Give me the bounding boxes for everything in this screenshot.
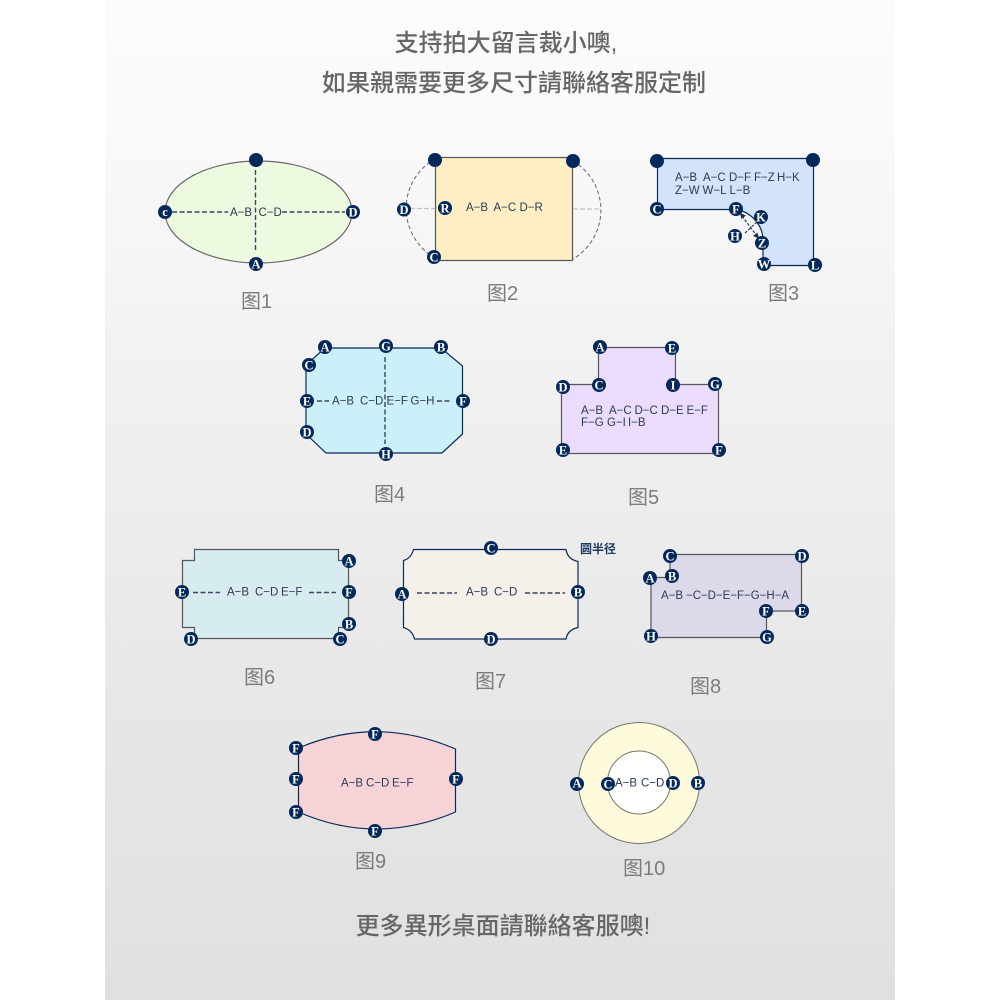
figure 2: rectangle with arc ends: R: [440, 202, 450, 216]
figure 4: chamfered rectangle: [300, 339, 470, 506]
figure 4: chamfered rectangle: H: [381, 448, 391, 462]
figure 3: notched rectangle: F−Z: [754, 172, 775, 184]
figure 6: notched corners rectangle: C−D: [255, 586, 278, 598]
figure 9: barrel shape: F: [371, 728, 379, 742]
figure 6: notched corners rectangle: A: [344, 554, 354, 568]
figure 1: ellipse: A−B: [230, 207, 252, 219]
figure 2: rectangle with arc ends: A−C: [494, 202, 516, 214]
caption 图9: 图9: [355, 851, 386, 873]
figure 7: concave corners rectangle: C: [486, 542, 496, 556]
figure 5: stepped rectangle: A−B: [581, 405, 603, 417]
figure 5: stepped rectangle: A−C: [609, 405, 632, 417]
figure 8: irregular rectangle: A: [645, 572, 655, 586]
title: 支持拍大留言裁小噢,: [395, 30, 617, 57]
title: 如果親需要更多尺寸請聯絡客服定制: [322, 70, 706, 97]
figure 3: notched rectangle: L: [811, 258, 819, 272]
figure 9: barrel shape: F: [292, 806, 300, 820]
figure 7: concave corners rectangle: B: [574, 586, 582, 600]
figure 3: notched rectangle: H: [730, 230, 740, 244]
figure 8: irregular rectangle: A−B: [661, 590, 683, 602]
figure 3: notched rectangle: K: [756, 210, 766, 224]
figure 3: notched rectangle: H−K: [777, 172, 800, 184]
caption 图2: 图2: [487, 283, 518, 305]
figure 8: irregular rectangle: [643, 549, 809, 698]
figure 6: notched corners rectangle: E−F: [281, 586, 302, 598]
figure 7: concave corners rectangle: [395, 541, 616, 693]
label: corner radius: 圆半径: [580, 541, 616, 556]
figure 6: notched corners rectangle: F: [345, 586, 353, 600]
figure 2: rectangle with arc ends: A−B: [466, 202, 488, 214]
figure 3: notched rectangle: Z−W: [675, 185, 700, 197]
caption 图5: 图5: [628, 487, 659, 509]
figure 4: chamfered rectangle: D: [302, 426, 312, 440]
figure 10: ring: A−B: [615, 778, 637, 790]
figure 4: chamfered rectangle: E: [303, 394, 311, 408]
figure 8: irregular rectangle: F: [762, 604, 770, 618]
figure 5: stepped rectangle: G: [710, 378, 720, 392]
figure 7: concave corners rectangle: C−D: [494, 586, 517, 598]
figure 6: notched corners rectangle: D: [186, 632, 196, 646]
figure 5: stepped rectangle: A: [595, 340, 605, 354]
figure 3: notched rectangle: F: [732, 202, 740, 216]
figure 9: barrel shape: C−D: [366, 778, 389, 790]
figure 10: ring: D: [668, 776, 678, 790]
figure 6: notched corners rectangle: B: [345, 618, 353, 632]
figure 3: notched rectangle: W−L: [702, 185, 727, 197]
figure 10: ring: C: [603, 778, 613, 792]
figure 5: stepped rectangle: I: [671, 378, 676, 392]
background panel: [105, 0, 895, 1000]
figure 5: stepped rectangle: F: [715, 444, 723, 458]
figure 3: notched rectangle: [650, 153, 822, 305]
figure 2: rectangle with arc ends: D−R: [520, 202, 543, 214]
caption 图10: 图10: [623, 858, 665, 880]
figure 5: stepped rectangle: G−I: [607, 417, 626, 429]
figure 6: notched corners rectangle: C: [335, 632, 345, 646]
title: [322, 30, 706, 97]
figure 9: barrel shape: E−F: [392, 778, 413, 790]
figure 5: stepped rectangle: C: [594, 378, 604, 392]
figure 8: irregular rectangle: B: [668, 570, 676, 584]
figure 10: ring: C−D: [641, 778, 664, 790]
figure 4: chamfered rectangle: A−B: [332, 396, 354, 408]
figure 10: ring: [570, 722, 705, 880]
figure 1: ellipse: c: [162, 205, 168, 219]
footer note: 更多異形桌面請聯絡客服噢!: [356, 913, 650, 940]
figure 3: notched rectangle: Z: [758, 236, 766, 250]
caption 图3: 图3: [768, 283, 799, 305]
figure 5: stepped rectangle: I−B: [628, 417, 646, 429]
figure 5: stepped rectangle: F−G: [581, 417, 604, 429]
figure 1: ellipse: C−D: [258, 207, 282, 219]
figure 9: barrel shape: F: [452, 772, 460, 786]
figure 9: barrel shape: F: [292, 772, 300, 786]
figure 8: irregular rectangle: C: [665, 550, 675, 564]
figure 2: rectangle with arc ends: C: [429, 250, 439, 264]
figure 5: stepped rectangle: E: [559, 444, 567, 458]
figure 5: stepped rectangle: E−F: [686, 405, 708, 417]
figure 8: irregular rectangle: D: [797, 550, 807, 564]
figure 3: notched rectangle: A−C: [703, 172, 726, 184]
figure 5: stepped rectangle: D−C: [634, 405, 658, 417]
figure 1: ellipse: D: [348, 206, 358, 220]
figure 5: stepped rectangle: D−E: [661, 405, 684, 417]
figure 7: concave corners rectangle: D: [486, 632, 496, 646]
figure 3: notched rectangle: A−B: [675, 172, 697, 184]
caption 图1: 图1: [241, 291, 272, 313]
figure 8: irregular rectangle: E: [798, 604, 806, 618]
figure 6: notched corners rectangle: [175, 550, 356, 689]
figure 10: ring: A: [572, 776, 582, 790]
figure 1: ellipse: A: [251, 258, 261, 272]
figure 8: irregular rectangle: H: [646, 630, 656, 644]
figure 8: irregular rectangle: −C−D−E−F−G−H−A: [686, 590, 789, 602]
caption 图8: 图8: [690, 676, 721, 698]
figure 6: notched corners rectangle: E: [178, 586, 186, 600]
figure 9: barrel shape: A−B: [341, 778, 363, 790]
figure 9: barrel shape: F: [371, 824, 379, 838]
figure 6: notched corners rectangle: A−B: [227, 586, 249, 598]
figure 2: rectangle with arc ends: D: [399, 203, 409, 217]
figure 4: chamfered rectangle: E−F: [386, 396, 408, 408]
figure 4: chamfered rectangle: G: [381, 340, 391, 354]
figure 3: notched rectangle: W: [758, 258, 771, 272]
figure 2: rectangle with arc ends: [397, 153, 601, 305]
figure 7: concave corners rectangle: A: [397, 588, 407, 602]
figure 5: stepped rectangle: [556, 340, 726, 509]
figure 4: chamfered rectangle: C−D: [360, 396, 383, 408]
figure 4: chamfered rectangle: G−H: [410, 396, 434, 408]
figure 3: notched rectangle: C: [652, 202, 662, 216]
figure 3: notched rectangle: D−F: [729, 172, 751, 184]
caption 图7: 图7: [475, 671, 506, 693]
figure 8: irregular rectangle: G: [762, 630, 772, 644]
figure 5: stepped rectangle: D: [558, 380, 568, 394]
figure 3: notched rectangle: L−B: [730, 185, 751, 197]
figure 7: concave corners rectangle: A−B: [466, 586, 488, 598]
caption 图6: 图6: [244, 667, 275, 689]
figure 9: barrel shape: [289, 727, 463, 873]
caption 图4: 图4: [374, 484, 405, 506]
figure 5: stepped rectangle: E: [668, 342, 676, 356]
figure 1: ellipse: [158, 153, 360, 313]
figure 4: chamfered rectangle: C: [304, 358, 314, 372]
figure 4: chamfered rectangle: F: [459, 394, 467, 408]
figure 4: chamfered rectangle: B: [437, 340, 445, 354]
figure 9: barrel shape: F: [292, 742, 300, 756]
figure 4: chamfered rectangle: A: [320, 340, 330, 354]
figure 10: ring: B: [694, 776, 702, 790]
